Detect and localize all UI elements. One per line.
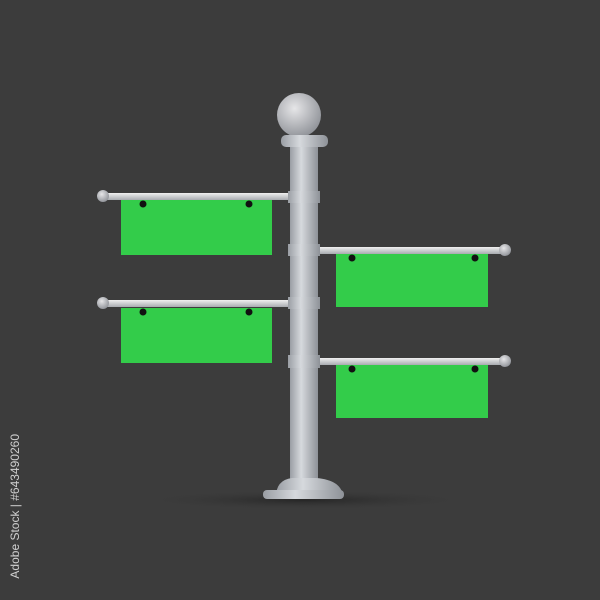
stock id: Adobe Stock | #643490260 bbox=[8, 434, 22, 579]
sign: right bottom bbox=[288, 355, 511, 418]
sign: left bottom bbox=[97, 297, 320, 363]
pole bbox=[263, 93, 344, 499]
ground shadow bbox=[135, 490, 475, 510]
sign: left top bbox=[97, 190, 320, 255]
sign: right top bbox=[288, 244, 511, 307]
